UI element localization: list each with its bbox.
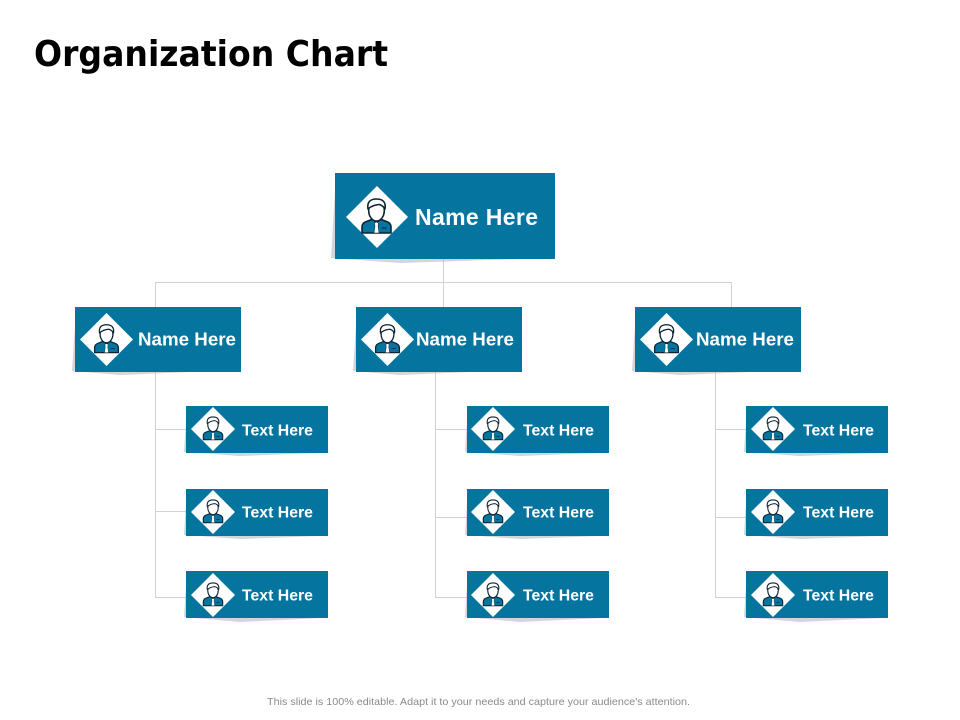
manager node 2: Name Here [416,328,514,350]
team 1 item 1: Text Here [242,422,313,440]
connector lines [156,259,746,598]
manager node 3 [632,307,801,375]
top node: Name Here [331,173,555,263]
team 1 item 3: Text Here [242,588,313,604]
team 1 item 1 [184,406,328,456]
team 2 item 1: Text Here [523,422,594,440]
manager node 2 [353,307,522,375]
team 3 item 3 [744,571,888,622]
team 1 item 2: Text Here [242,504,313,522]
team 3 item 1 [744,406,888,456]
title: Organization Chart [34,34,388,75]
team 1 item 2 [184,489,328,539]
team 3 item 3: Text Here [803,588,874,604]
team 3 item 2 [744,489,888,539]
team 1 item 3 [184,571,328,622]
team 2 item 3 [465,571,609,622]
team 3 item 1: Text Here [803,422,874,440]
team 2 item 1 [465,406,609,456]
manager node 1 [72,307,241,375]
manager node 1: Name Here [138,328,236,350]
team 3 item 2: Text Here [803,504,874,522]
top node: Name Here: Name Here [415,204,538,230]
footer note: This slide is 100% editable. Adapt it to your needs and capture your audience's attention. [267,696,690,708]
manager node 3: Name Here [696,328,794,350]
team 2 item 3: Text Here [523,588,594,604]
team 2 item 2 [465,489,609,539]
team 2 item 2: Text Here [523,504,594,522]
